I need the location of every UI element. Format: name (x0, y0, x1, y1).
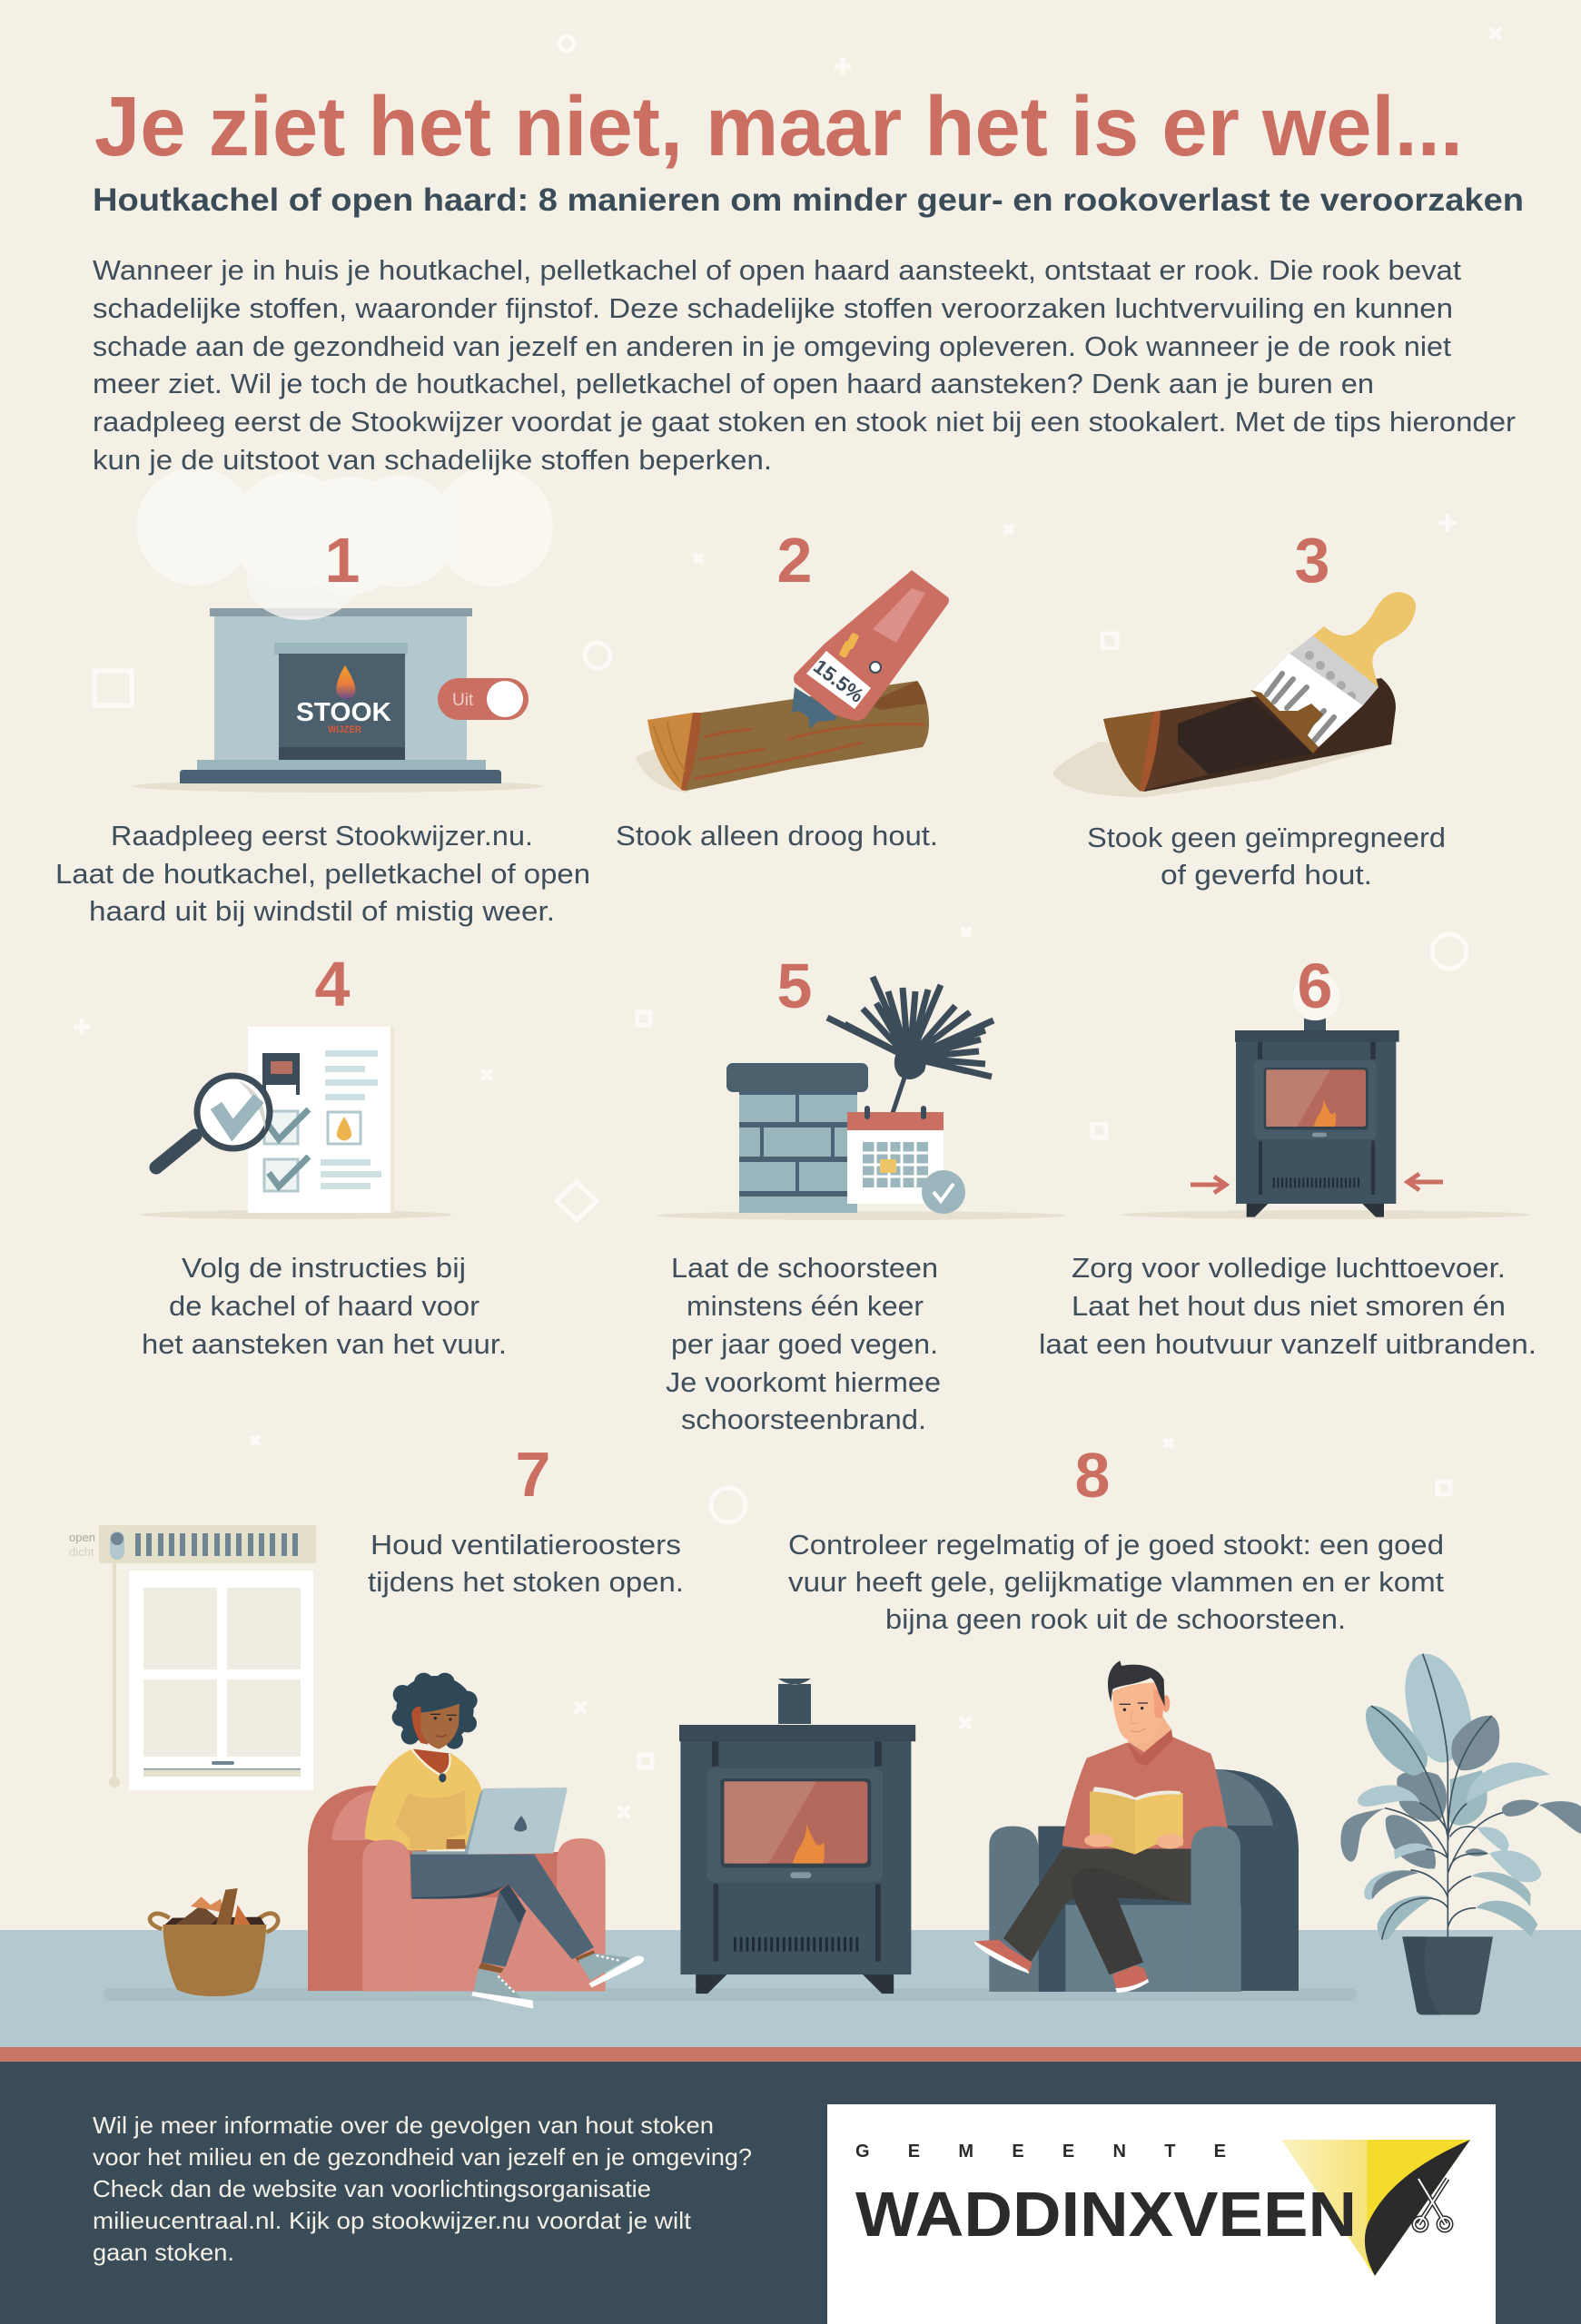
blue armchair back (1181, 1769, 1299, 1991)
illustration: fireplace with Stookwijzer: STOOK (296, 698, 391, 727)
number 2: 2 (777, 525, 812, 596)
tip 7 text: Houd ventilatieroosters (371, 1529, 681, 1561)
tip 4 text: de kachel of haard voor (169, 1290, 479, 1322)
tip 5 text: Je voorkomt hiermee (666, 1366, 941, 1398)
arrow: right (1408, 1174, 1443, 1190)
sweep brush (827, 977, 993, 1113)
tip 6 text: Zorg voor volledige luchttoevoer. (1072, 1252, 1506, 1284)
tip 8 text (788, 1529, 1444, 1635)
number 3: 3 (1295, 525, 1329, 596)
panel: tip 6 (1039, 950, 1537, 1360)
toggle switch: Uit (452, 691, 474, 710)
illustration: wood stove (679, 1679, 915, 1994)
logo: Gemeente Waddinxveen (827, 2104, 1496, 2324)
intro text: raadpleeg eerst de Stookwijzer voordat je gaat stoken en stook niet bij een stookalert. Met de tips hieronder (93, 406, 1516, 438)
panel: tip 1 (55, 525, 590, 927)
stove (1235, 1019, 1399, 1217)
smoke cloud (136, 467, 1340, 1020)
intro text: schadelijke stoffen, waaronder fijnstof. Deze schadelijke stoffen veroorzaken luchtvervuiling en kunnen (93, 292, 1453, 324)
illustration: ventilation grille: dicht (69, 1545, 94, 1559)
tip 1 text: Laat de houtkachel, pelletkachel of open (55, 858, 590, 890)
tip 1 text (55, 820, 590, 927)
number 7: 7 (516, 1439, 550, 1510)
illustration: woman on armchair with laptop (308, 1673, 644, 2009)
tip 4 text (142, 1252, 507, 1360)
subtitle: Houtkachel of open haard: 8 manieren om minder geur- en rookoverlast te veroorzaken (93, 182, 1524, 218)
panel: tip 4 (140, 949, 507, 1360)
number 5: 5 (777, 950, 812, 1021)
illustration: chimney, sweep brush and calendar (657, 977, 1066, 1220)
man (974, 1660, 1241, 1993)
tip 1 text: Raadpleeg eerst Stookwijzer.nu. (111, 820, 533, 852)
illustration: painted log and brush (1052, 592, 1416, 797)
arrow: left (1191, 1177, 1226, 1193)
tip 6 text (1039, 1252, 1537, 1360)
illustration: fireplace with Stookwijzer: WIJZER (328, 724, 361, 735)
number 1: 1 (325, 525, 360, 596)
illustration: fireplace with Stookwijzer (133, 542, 543, 793)
title: Je ziet het niet, maar het is er wel... (94, 79, 1463, 173)
tip 6 text: laat een houtvuur vanzelf uitbranden. (1039, 1328, 1537, 1360)
footer text: Wil je meer informatie over de gevolgen van hout stoken (93, 2112, 714, 2139)
illustration: instructions and magnifier (140, 1027, 452, 1219)
tip 4 text: Volg de instructies bij (182, 1252, 466, 1284)
intro text: Wanneer je in huis je houtkachel, pelletkachel of open haard aansteekt, ontstaat er rook. Die rook bevat (93, 254, 1461, 286)
illustration: potted plant (1340, 1654, 1581, 2014)
tip 3 text: Stook geen geïmpregneerd (1087, 822, 1446, 853)
intro text: meer ziet. Wil je toch de houtkachel, pelletkachel of open haard aansteken? Denk aan je buren en (93, 368, 1374, 399)
tip 2 text: Stook alleen droog hout. (616, 820, 938, 852)
tip 4 text: het aansteken van het vuur. (142, 1328, 507, 1360)
intro text: schade aan de gezondheid van jezelf en anderen in je omgeving opleveren. Ook wanneer je de rook niet (93, 330, 1451, 362)
tip 8 text: vuur heeft gele, gelijkmatige vlammen en er komt (788, 1566, 1444, 1598)
panel: footer (0, 2062, 1581, 2324)
illustration: log with moisture meter (636, 570, 949, 793)
intro text: kun je de uitstoot van schadelijke stoffen beperken. (93, 444, 772, 476)
woman (362, 1673, 644, 2009)
tip 8 text: bijna geen rook uit de schoorsteen. (885, 1603, 1346, 1635)
tip 7 text: tijdens het stoken open. (368, 1566, 684, 1598)
tip 6 text: Laat het hout dus niet smoren én (1072, 1290, 1506, 1322)
illustration: wood basket (150, 1888, 278, 1996)
tip 3 text: of geverfd hout. (1161, 859, 1372, 891)
tip 5 text: per jaar goed vegen. (671, 1328, 938, 1360)
toggle switch (438, 678, 529, 720)
number 6: 6 (1298, 950, 1332, 1021)
tip 5 text: schoorsteenbrand. (681, 1403, 926, 1435)
salmon band (0, 2047, 1581, 2062)
logo: Gemeente Waddinxveen: GEMEENTE (855, 2142, 1226, 2162)
tip 1 text: haard uit bij windstil of mistig weer. (89, 895, 555, 927)
footer text (93, 2112, 752, 2266)
number 8: 8 (1075, 1440, 1110, 1511)
panel: tip 8 (788, 1440, 1444, 1635)
tip 7 text (368, 1529, 684, 1598)
floor (0, 1930, 1581, 2048)
panel: tip 5 (657, 950, 1066, 1435)
footer text: milieucentraal.nl. Kijk op stookwijzer.nu voordat je wilt (93, 2207, 692, 2234)
footer text: gaan stoken. (93, 2239, 234, 2266)
salmon armchair (308, 1786, 572, 1991)
tip 3 text (1087, 822, 1446, 891)
panel: tip 7 (69, 1439, 684, 1790)
decorative marks top (74, 28, 1501, 1817)
footer text: Check dan de website van voorlichtingsorganisatie (93, 2175, 651, 2202)
illustration: ventilation grille: open (69, 1531, 95, 1544)
panel: tip 2 (616, 525, 949, 852)
number 4: 4 (315, 949, 351, 1019)
illustration: man on armchair with book (974, 1660, 1299, 1993)
panel: tip 3 (1052, 525, 1446, 891)
illustration: log with moisture meter: 15.5% (809, 655, 868, 707)
illustration: window (129, 1571, 313, 1790)
illustration: stove with air arrows (1122, 1019, 1531, 1219)
footer text: voor het milieu en de gezondheid van jezelf en je omgeving? (93, 2143, 752, 2171)
tip 5 text (666, 1252, 941, 1435)
logo shield (1281, 2140, 1470, 2276)
tip 5 text: minstens één keer (687, 1290, 924, 1322)
calendar (847, 1106, 944, 1204)
tip 5 text: Laat de schoorsteen (671, 1252, 938, 1284)
intro text (93, 254, 1516, 476)
logo: Gemeente Waddinxveen: WADDINXVEEN (855, 2179, 1357, 2250)
illustration: ventilation grille (69, 1525, 316, 1787)
tip 8 text: Controleer regelmatig of je goed stookt: een goed (788, 1529, 1444, 1561)
